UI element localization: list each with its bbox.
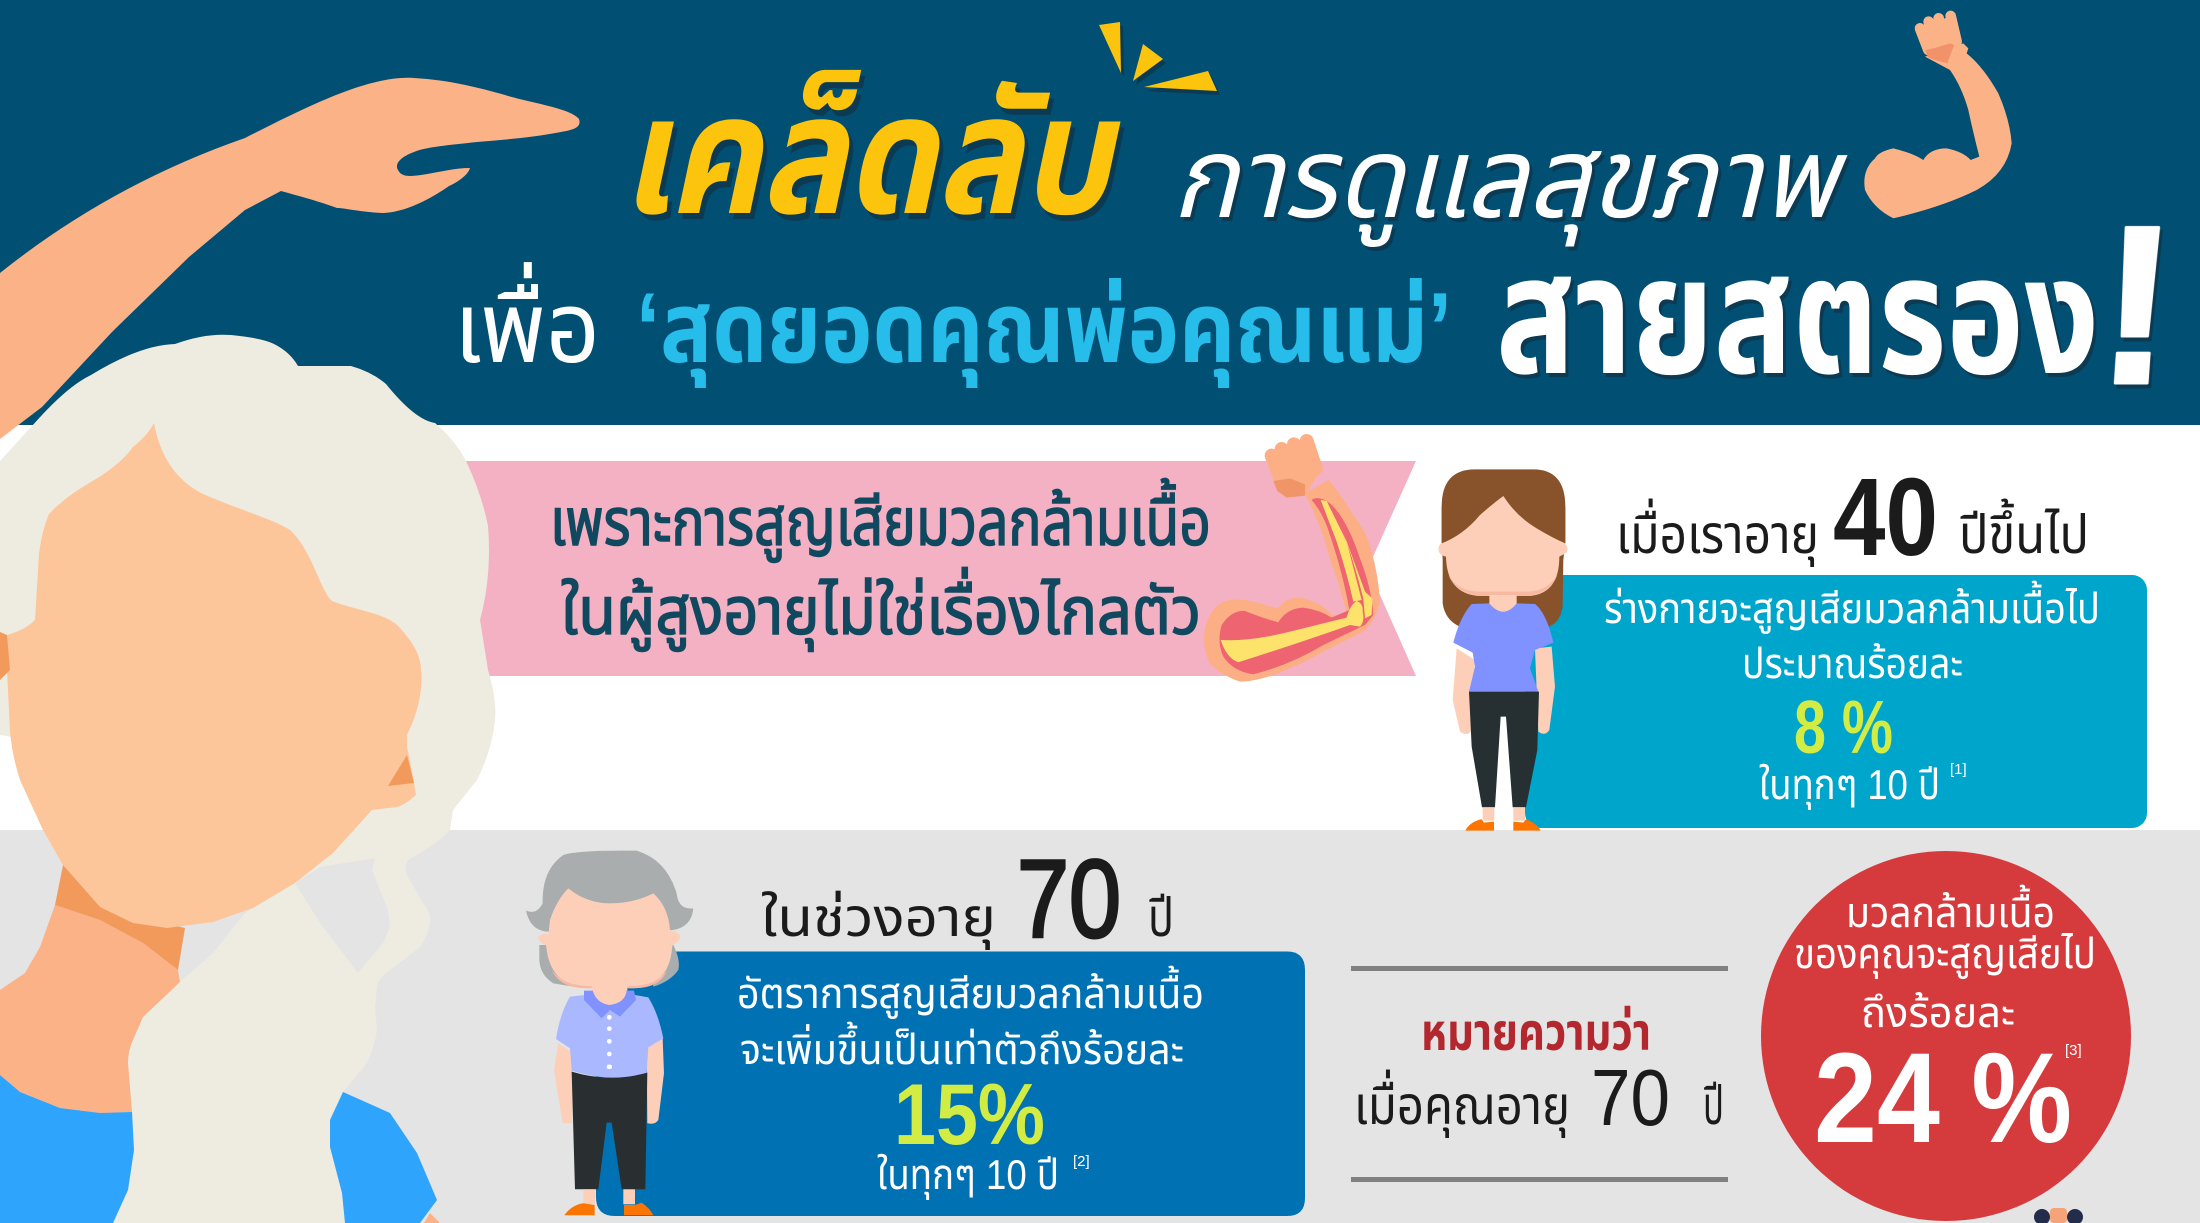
meaning text — [1354, 1004, 1724, 1142]
when you are 70: 70 — [1591, 1053, 1670, 1142]
divider bottom — [1351, 1177, 1728, 1182]
title: สุดยอดคุณพ่อคุณแม่: ‘สุดยอดคุณพ่อคุณแม่’ — [636, 272, 1452, 388]
when you are 70 — [1354, 1053, 1724, 1142]
red circle callout: 24 % — [1814, 1027, 2072, 1170]
heading age 70 — [761, 838, 1174, 961]
body text: จะเพิ่มขึ้นเป็นเท่าตัวถึงร้อยละ — [740, 1021, 1184, 1073]
body text — [737, 965, 1204, 1200]
pink banner — [440, 461, 1416, 676]
arm edge — [424, 1213, 440, 1223]
big woman figure with raised arm — [0, 78, 580, 1223]
red circle callout — [1761, 851, 2131, 1221]
title: เคล็ดลับ: เคล็ดลับ — [621, 63, 1121, 249]
heading age 70: ในช่วงอายุ — [761, 888, 996, 950]
banner line 1: เพราะการสูญเสียมวลกล้ามเนื้อ — [550, 478, 1211, 563]
teal box — [1525, 575, 2147, 828]
body text: อัตราการสูญเสียมวลกล้ามเนื้อ — [737, 965, 1204, 1019]
blue box — [596, 952, 1305, 1216]
body text: ในทุกๆ 10 ปี — [877, 1151, 1059, 1200]
banner text — [550, 478, 1211, 652]
body text: 15% — [894, 1067, 1045, 1163]
body text: ร่างกายจะสูญเสียมวลกล้ามเนื้อไป — [1604, 580, 2100, 634]
heading age 70: 70 — [1017, 838, 1121, 961]
neck and chest — [0, 905, 180, 1113]
sparkle — [1099, 22, 1217, 91]
figure: older person — [526, 851, 693, 1215]
red circle callout: มวลกล้ามเนื้อ — [1846, 884, 2055, 936]
title: exclamation mark: ! — [2091, 178, 2184, 431]
heading age 40 — [1616, 456, 2089, 579]
ear shadow left — [0, 632, 10, 680]
icon: small figure at bottom edge — [2034, 1208, 2083, 1223]
card: age 70 — [596, 838, 1305, 1216]
body text: [1] — [1950, 761, 1967, 778]
figure: young woman — [1438, 469, 1567, 831]
red circle callout: ถึงร้อยละ — [1861, 989, 2015, 1036]
divider top — [1351, 966, 1728, 971]
raised arm — [0, 78, 580, 439]
face — [7, 423, 421, 928]
red circle callout: ของคุณจะสูญเสียไป — [1794, 930, 2096, 979]
body text: 8 % — [1794, 685, 1893, 769]
icon: flexed arm — [1864, 16, 2012, 218]
shirt left — [0, 1075, 134, 1223]
title: เพื่อ: เพื่อ — [454, 262, 600, 383]
หมายความว่า: หมายความว่า — [1421, 1004, 1651, 1062]
body text — [1604, 580, 2100, 810]
body text: [2] — [1073, 1153, 1090, 1170]
header band — [0, 0, 2200, 425]
banner line 2: ในผู้สูงอายุไม่ใช่เรื่องไกลตัว — [561, 567, 1201, 652]
when you are 70: เมื่อคุณอายุ — [1354, 1069, 1570, 1138]
ear shadow right — [388, 755, 414, 786]
card: age 40 — [1525, 456, 2147, 828]
red circle callout: [3] — [2065, 1042, 2082, 1059]
gap in hair — [295, 858, 390, 973]
body text: ประมาณร้อยละ — [1742, 640, 1963, 687]
body text: ในทุกๆ 10 ปี — [1759, 761, 1940, 810]
shirt right — [330, 1092, 437, 1223]
hair — [0, 335, 495, 1223]
heading age 40: 40 — [1833, 456, 1938, 579]
heading age 70: ปี — [1148, 888, 1174, 948]
heading age 40: เมื่อเราอายุ — [1616, 498, 1819, 567]
icon: arm with bones — [1204, 441, 1380, 682]
heading age 40: ปีขึ้นไป — [1959, 498, 2089, 565]
neck shadow — [55, 865, 185, 970]
when you are 70: ปี — [1703, 1076, 1724, 1136]
title: การดูแลสุขภาพ: การดูแลสุขภาพ — [1172, 115, 1848, 247]
